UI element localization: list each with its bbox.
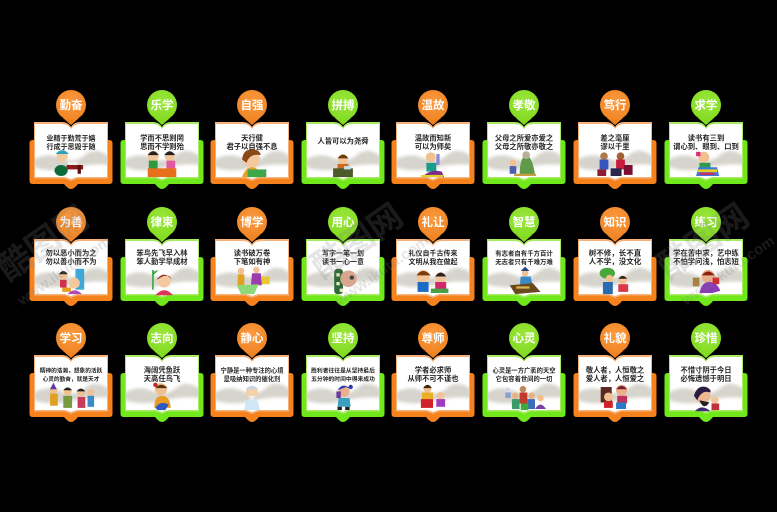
motto: 树不修，长不直 <box>589 248 642 258</box>
illustration: child with scroll <box>153 383 171 410</box>
badge: 拼搏: 拼搏 <box>332 98 355 112</box>
motto: 心灵是一方广袤的天空 <box>493 366 555 374</box>
motto: 笨人勤学早成材 <box>136 257 188 266</box>
motto: 差之毫厘 <box>600 134 630 142</box>
book <box>210 239 294 306</box>
motto: 不惜寸阴于今日 <box>680 366 732 374</box>
motto: 五分钟的时间中得来成功 <box>311 375 375 383</box>
badge: 珍惜: 珍惜 <box>694 331 718 345</box>
card: 勤奋 <box>30 90 112 189</box>
motto: 学在苦中求，艺中练 <box>673 248 740 258</box>
motto: 写字一笔一划 <box>322 248 364 258</box>
badge: 孝敬: 孝敬 <box>512 98 536 112</box>
card: 温故 <box>392 90 474 189</box>
card: 乐学 <box>120 90 204 189</box>
book <box>30 239 112 306</box>
illustration: two scholars reading <box>237 267 270 294</box>
badge: 坚持: 坚持 <box>332 331 355 345</box>
card: 智慧 <box>482 207 566 306</box>
illustration: child practising <box>693 270 720 293</box>
illustration: elder and child <box>694 387 719 411</box>
card: 用心 <box>302 207 384 306</box>
book <box>664 122 748 189</box>
book <box>664 239 748 306</box>
card: 自强 <box>210 90 294 189</box>
badge: 礼让: 礼让 <box>422 215 445 229</box>
card: 珍惜 <box>664 323 748 422</box>
badge: 为善: 为善 <box>60 215 82 229</box>
card: 孝敬 <box>482 90 566 189</box>
badge: 尊师: 尊师 <box>422 331 444 345</box>
book <box>302 355 384 422</box>
motto: 无志者只有千难万难 <box>495 257 553 266</box>
motto: 思而不学则殆 <box>140 142 185 151</box>
motto: 心灵的勤奋，就是天才 <box>43 375 100 383</box>
board content <box>0 90 777 422</box>
book <box>120 239 204 306</box>
motto: 业精于勤荒于嬉 <box>46 134 96 142</box>
badge: 温故: 温故 <box>422 98 445 112</box>
motto: 礼仪自千古传来 <box>408 248 458 258</box>
illustration: elder and child <box>510 151 536 176</box>
book <box>392 355 474 422</box>
card: 知识 <box>574 207 656 306</box>
badge: 勤奋: 勤奋 <box>60 98 83 112</box>
book <box>574 122 656 189</box>
motto: 敬人者，人恒敬之 <box>586 366 645 374</box>
book <box>392 239 474 306</box>
motto: 人皆可以为尧舜 <box>317 136 369 146</box>
illustration: teacher and pupil <box>421 385 445 408</box>
illustration: child at desk <box>333 155 353 177</box>
illustration: sage in white <box>244 386 260 410</box>
watermark: 酷图网 <box>651 197 756 287</box>
card: 礼让 <box>392 207 474 306</box>
card: 心灵 <box>482 323 566 422</box>
motto: 胜利者往往是从坚持最后 <box>311 366 375 374</box>
book <box>120 355 204 422</box>
motto: 君子以自强不息 <box>226 142 278 151</box>
illustration: stack of books <box>696 152 719 176</box>
card: 博学 <box>210 207 294 306</box>
card: 静心 <box>210 323 294 422</box>
book <box>574 239 656 306</box>
badge: 求学: 求学 <box>694 98 718 112</box>
card: 礼貌 <box>574 323 656 422</box>
badge: 练习: 练习 <box>694 215 718 229</box>
illustration: child with bamboo <box>152 270 173 295</box>
motto: 学者必求师 <box>415 366 451 374</box>
motto: 是吸纳知识的催化剂 <box>224 374 280 383</box>
badge: 博学: 博学 <box>240 215 264 229</box>
book <box>482 239 566 306</box>
card: 律束 <box>120 207 204 306</box>
badge: 自强: 自强 <box>240 98 264 112</box>
motto: 读书破万卷 <box>234 248 271 258</box>
book <box>120 122 204 189</box>
card: 学习 <box>30 323 112 422</box>
illustration: family greeting <box>601 385 627 409</box>
watermark: www.ikutu.com <box>14 233 114 310</box>
card: 拼搏 <box>302 90 384 189</box>
badge: 静心: 静心 <box>240 331 264 345</box>
motto: 天行健 <box>241 134 264 142</box>
motto: 学而不思则罔 <box>140 134 184 142</box>
card: 坚持 <box>302 323 384 422</box>
motto: 海阔凭鱼跃 <box>144 366 181 374</box>
motto: 父母之所爱亦爱之 <box>495 134 554 142</box>
illustration: boy with book <box>336 385 353 410</box>
book <box>482 355 566 422</box>
book <box>482 122 566 189</box>
motto: 从师不可不谨也 <box>407 374 459 383</box>
book <box>302 122 384 189</box>
illustration: two children at a table <box>148 151 176 177</box>
illustration: crowd of children <box>505 386 546 410</box>
illustration: scholar at desk <box>510 267 540 294</box>
book <box>574 355 656 422</box>
illustration: group of children <box>597 152 633 176</box>
badge: 学习: 学习 <box>60 331 82 345</box>
motto: 宁静是一种专注的心境 <box>221 366 284 374</box>
motto: 下笔如有神 <box>234 257 270 266</box>
badge: 礼貌: 礼貌 <box>604 331 627 345</box>
motto: 温故而知新 <box>415 134 452 142</box>
illustration: two children bowing <box>416 270 448 293</box>
book <box>210 122 294 189</box>
badge: 用心: 用心 <box>332 216 355 229</box>
motto: 行成于思毁于随 <box>46 142 96 151</box>
motto: 可以为师矣 <box>415 142 452 151</box>
illustration: children and tree <box>600 268 628 294</box>
illustration: child studying <box>54 150 83 176</box>
book <box>30 355 112 422</box>
watermark: www.ikutu.com <box>332 233 432 310</box>
card: 为善 <box>30 207 112 306</box>
illustration: children and door <box>59 269 84 294</box>
motto: 天高任鸟飞 <box>144 374 181 383</box>
watermark <box>0 197 777 310</box>
badge: 知识: 知识 <box>604 215 627 229</box>
motto: 人不学，没文化 <box>589 256 642 266</box>
motto: 笨鸟先飞早入林 <box>136 248 188 258</box>
card: 笃行 <box>574 90 656 189</box>
motto: 读书有三到 <box>688 134 724 142</box>
illustration: four children <box>50 383 94 408</box>
motto: 谬以千里 <box>600 142 630 151</box>
motto: 精神的浩瀚，想象的活跃 <box>40 366 103 374</box>
card: 尊师 <box>392 323 474 422</box>
motto: 文明从我在做起 <box>408 257 458 266</box>
watermark: www.ikutu.com <box>678 233 777 310</box>
motto: 必悔遗憾于明日 <box>680 374 732 383</box>
badge: 志向: 志向 <box>150 331 174 345</box>
illustration: child reading <box>242 150 266 177</box>
badge: 笃行: 笃行 <box>604 98 627 112</box>
motto: 谓心到、眼到、口到 <box>673 142 739 151</box>
motto: 勿以善小而不为 <box>45 257 97 266</box>
illustration: child in checkered frame <box>334 269 357 294</box>
card: 求学 <box>664 90 748 189</box>
motto: 它包容着世间的一切 <box>496 374 552 383</box>
motto: 读书一心一意 <box>322 257 364 266</box>
motto: 父母之所敬亦敬之 <box>495 142 554 151</box>
badge: 律束: 律束 <box>150 215 174 229</box>
badge: 乐学: 乐学 <box>150 98 174 112</box>
motto: 不怕学问浅，怕志短 <box>673 257 740 266</box>
watermark: 酷图网 <box>305 197 410 287</box>
badge: 智慧: 智慧 <box>512 215 536 229</box>
book <box>302 239 384 306</box>
book <box>392 122 474 189</box>
card: 志向 <box>120 323 204 422</box>
badge: 心灵: 心灵 <box>512 332 536 345</box>
illustration: child sitting <box>421 152 444 177</box>
book <box>210 355 294 422</box>
book <box>664 355 748 422</box>
card: 练习 <box>664 207 748 306</box>
book <box>30 122 112 189</box>
motto: 有志者自有千方百计 <box>495 248 553 258</box>
motto: 爱人者，人恒爱之 <box>586 374 645 383</box>
motto: 勿以恶小而为之 <box>45 248 97 258</box>
